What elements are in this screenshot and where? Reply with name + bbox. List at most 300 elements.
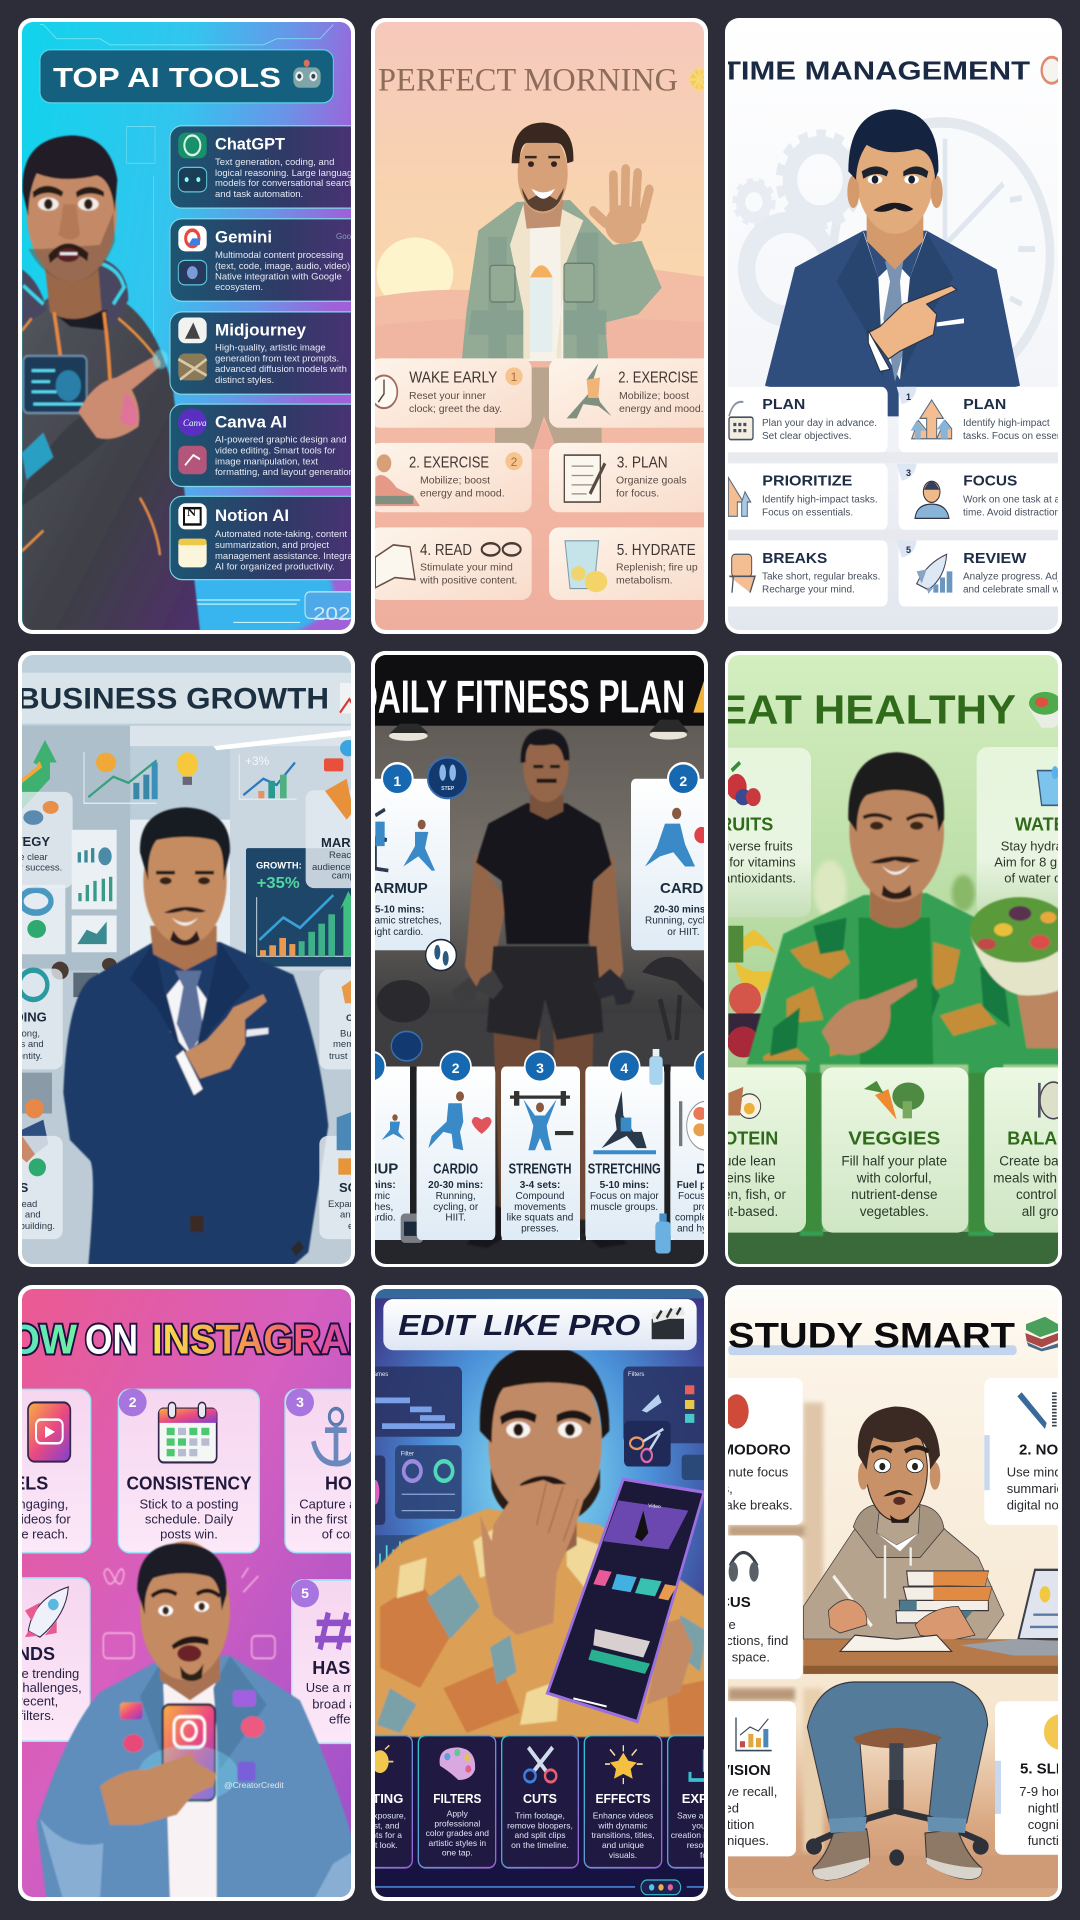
panel: Customer trust: Build [340,1029,361,1040]
panel: Warmup bottom [330,1052,423,1243]
person: smiling man in patterned jacket with salad bowl [747,752,1070,1236]
panel: Gemini: Goo [336,232,352,241]
panel: Customer trust: members [333,1039,373,1050]
panel: Cardio top: 20-30 mins: [654,904,709,916]
panel: Review [897,540,1058,606]
panel labels: floating windows: Filter [401,1451,414,1457]
panel: Export: EXPORT [682,1791,735,1806]
panel: Revision: spaced [697,1800,739,1815]
panel: Exercise top right: energy and mood. [619,403,704,415]
panel: Prioritize: PRIORITIZE [762,473,852,490]
card: Business Growth [18,651,355,1267]
panel: Sales: Lead [16,1199,37,1210]
card: Study Smart [678,1285,1080,1904]
panel: Notes: digital notes. [1007,1497,1080,1512]
panel: Fruits: FRUITS [708,814,773,834]
person: smiling man waving [462,122,662,449]
panel: Customer trust [319,970,373,1069]
panel: Plan: for focus. [616,488,659,500]
year badge [304,591,351,620]
panel: Hooks: HOOKS [325,1473,391,1493]
panel: Plan: 3. PLAN [617,455,668,472]
panel: Marketing: MARKETING [321,835,400,850]
panel: Strength [501,1051,580,1240]
panel: Revision: REVISION [699,1762,771,1779]
footer pill [370,1880,710,1895]
panel: Balance [984,1067,1080,1233]
panel: Strength: presses. [521,1224,559,1235]
panel: Sleep: 7-9 hours [1019,1784,1075,1799]
panel: Plan right: PLAN [963,396,1006,413]
panel: Water: WATER [1015,814,1079,834]
panel: Lighting: highlights for a [347,1830,402,1840]
panel: Pomodoro [678,1378,803,1525]
icon: phone with video editor [547,1479,704,1722]
panel: Export: your final [692,1820,727,1830]
panel: Canva AI: image manipulation, text [215,456,318,467]
panel: Cuts: Trim footage, [515,1811,565,1821]
icon: growth chart [339,683,351,714]
person: man with dumbbells [452,729,635,1248]
panel: Gemini [170,218,351,302]
title [0,1315,380,1362]
panel: Veggies: nutrient-dense [851,1187,937,1202]
panel: Notion AI: Notion AI [215,506,289,525]
panel: Protein: chicken, fish, or [692,1187,786,1202]
panel: Focus: FOCUS [963,473,1017,490]
panel: Reels [0,1389,91,1553]
panel: Filters: FILTERS [433,1791,482,1806]
panel: Notion AI: management assistance. Integrates [215,551,366,562]
panel: Stretching: STRETCHING [588,1161,661,1178]
panel: Marketing [306,740,351,888]
panel: Exercise top right: Mobilize; boost [619,390,689,402]
panel: Effects: EFFECTS [596,1791,651,1806]
panel: Lighting: Adjust exposure, [343,1811,406,1821]
panel: Customer trust: trust [329,1051,348,1062]
person: student at desk [803,1407,1070,1880]
panel: Filters: Apply [447,1808,469,1818]
panel: ChatGPT: models for conversational search [215,178,354,189]
panel: Notion AI: AI for organized productivity. [215,562,335,573]
panel: Canva AI: AI-powered graphic design and [215,435,347,446]
panel: Pomodoro: sessions, [678,1481,733,1496]
panel: Stretching: Focus on major [590,1191,659,1202]
panel: Notion AI: Automated note-taking, content [215,529,347,540]
card: Top AI Tools [18,18,377,649]
panel: Filters: artistic styles in [428,1838,486,1848]
growth board: +3% [245,754,270,768]
panel: Gemini: (text, code, image, audio, video). [215,261,353,272]
title pill [383,1299,697,1350]
panel: Plan left: Plan your day in advance. [762,418,877,429]
panel: Consistency: Stick to a posting [140,1496,238,1512]
panel: Hashtags [291,1580,412,1743]
background: gym [370,652,710,1269]
panel: Read: with positive content. [419,574,517,586]
panel: Diet: protein, [693,1202,726,1213]
panel: Hydrate: Replenish; fire up [616,561,698,573]
panel: ChatGPT [170,125,351,209]
card: Perfect Morning [370,16,716,637]
panel: Cuts: and split clips [514,1830,566,1840]
panel: Scaling: e [348,1221,353,1232]
person: man in navy suit pointing [765,109,1020,416]
panel: Midjourney: generation from text prompts. [215,354,339,364]
panel: Sleep: nightly [1028,1800,1066,1815]
panel: Cuts [502,1736,578,1868]
title: EAT HEALTHY [718,687,1016,733]
panel labels: floating windows: Frames [368,1372,388,1378]
panel: Prioritize: Focus on essentials. [762,508,853,519]
card: Time Management [720,16,1080,637]
panel: ChatGPT: logical reasoning. Large language [215,168,358,179]
panel: Stretching: 5-10 mins: [600,1180,649,1191]
panel: Marketing: Reach [329,850,356,861]
panel: Midjourney: Midjourney [215,320,307,339]
icon: step badges: STEP [441,786,455,792]
panel: Lighting: perfect look. [351,1840,398,1850]
panel: Gemini: Gemini [215,227,272,246]
icon: clapperboard [652,1307,685,1339]
panel: Notes: summaries, [1007,1481,1074,1496]
panel: Warmup bottom: light cardio. [345,1213,396,1224]
panel: Protein [692,1067,806,1233]
panel: Plan right: 1 [906,392,911,402]
panel: Effects: and unique [602,1840,644,1850]
panel: Canva AI: video editing. Smart tools for [215,446,335,457]
icon: water bottles [649,1049,671,1253]
panel: Hashtags: Use a mix of [306,1680,378,1695]
panel: Fruits: for vitamins [729,854,796,869]
background: pink purple gradient [20,1286,353,1902]
panel: Warmup bottom: 5-10 mins: [346,1180,396,1191]
panel: Marketing: campaigns [332,871,378,882]
panel: Hashtags: effectively. [329,1712,389,1726]
panel: Wake Early: 1 [511,370,518,384]
panel: ChatGPT: and task automation. [215,189,303,200]
year badge: 2026 [313,604,363,624]
panel: Read: 4. READ [420,542,472,559]
panel: Exercise top right: 2. EXERCISE [618,370,698,387]
panel: Strength: Compound [516,1191,564,1202]
panel: Midjourney: distinct styles. [215,375,274,386]
panel: Warmup bottom: WARMUP [330,1161,398,1178]
panel: Focus: quiet space. [700,1650,770,1664]
panel: Cardio top: Running, cycling, [645,916,721,927]
panel: Water [977,747,1080,918]
panel: Diet: complex [675,1213,712,1224]
panel: Strength: like squats and [507,1213,573,1224]
panel: Hashtags: HASHTAGS [312,1658,412,1678]
panel: Plan [549,443,716,512]
panel: Effects: with dynamic [597,1820,648,1830]
panel: Trends: Use trending [6,1666,79,1681]
panel: Exercise left: energy and mood. [420,488,505,500]
panel: Wake Early: Reset your inner [409,390,487,402]
growth board: GROWTH: [256,860,302,870]
panel: Veggies: VEGGIES [848,1129,940,1149]
panel: Cardio top: CARDIO [660,880,719,897]
panel: Export: creation in high [671,1830,729,1840]
background: sunrise dunes [370,16,710,637]
panel: Sleep: function. [1028,1833,1077,1848]
panel: Cardio bottom: cycling, or [433,1202,479,1213]
growth board [245,754,356,967]
panel: Cuts: remove bloopers, [507,1820,573,1830]
panel: Diet: Focus on [678,1191,719,1202]
panel: Warmup bottom: Dynamic [351,1191,390,1202]
panel labels: floating windows [368,1372,644,1457]
background: neon studio [370,1286,713,1907]
panel: Strength: 3-4 sets: [520,1180,560,1191]
panel: Fruits: and antioxidants. [698,870,796,885]
panel: ChatGPT: Text generation, coding, and [215,157,334,168]
panel: Focus: time. Avoid distractions. [963,508,1068,519]
panel: Effects: transitions, titles, [591,1830,655,1840]
panel: Exercise left: 2 [511,455,518,469]
panel: Balance: control for [1016,1187,1077,1202]
card: Eat Healthy [692,651,1080,1269]
panel: ChatGPT: ChatGPT [215,134,286,153]
panel: Export [668,1736,735,1868]
background: gears and clock [728,117,1058,630]
panel: Canva AI: formatting, and layout generation. [215,467,357,478]
panel: Canva AI [170,404,351,488]
panel: Lighting: LIGHTING [341,1791,403,1806]
icon: robot [293,60,321,88]
panel: Revision: techniques. [702,1833,769,1848]
panel: Plan left: Set clear objectives. [762,431,852,442]
panel: Wake Early: clock; greet the day. [409,403,502,415]
panel: Sales [0,1136,63,1239]
icon: phone with video editor: Video [648,1503,661,1510]
panel: Effects: visuals. [609,1850,637,1860]
panel: Focus [687,1536,803,1679]
panel: Strength: movements [514,1202,566,1213]
icon: flexed arm [693,679,705,713]
panel labels: floating windows: Filters [628,1372,644,1378]
fruit pile [727,926,777,1058]
panel: Marketing: audience with [312,862,370,873]
panel: Review: and celebrate small wins. [963,584,1075,595]
panel: Gemini: ecosystem. [215,282,263,293]
panel: Notion AI [170,496,351,580]
panel: Sales: and [25,1210,41,1221]
panel: Cardio bottom: CARDIO [433,1161,478,1178]
panel: Breaks: BREAKS [762,550,827,567]
panel: Consistency: schedule. Daily [145,1512,234,1527]
panel: Hooks: in the first 3 secs [291,1512,389,1527]
person: surprised man in tech hoodie [22,135,200,631]
panel: Plan right [896,386,1058,452]
icon: alarm clock [1042,57,1062,83]
panel: Hydrate: 5. HYDRATE [617,542,696,559]
title pill: TOP AI TOOLS [53,62,281,93]
title pill: EDIT LIKE PRO [398,1310,641,1342]
panel: Veggies [822,1067,968,1233]
panel: Gemini: Multimodal content processing [215,250,343,261]
panel: Stretching: 4 [620,1060,628,1076]
title: PERFECT MORNING [378,63,678,99]
title: BUSINESS GROWTH [17,682,329,716]
panel: Effects [584,1736,662,1868]
panel: Fruits: diverse fruits [719,838,793,854]
panel: Stretching: muscle groups. [590,1202,658,1213]
panel: Plan: Organize goals [616,474,687,486]
panel: Midjourney: advanced diffusion models with [215,364,347,375]
panel: Export: Save and [677,1811,713,1821]
credit: @CreatorCredit [224,1780,284,1790]
panel: Canva AI: Canva [183,418,207,428]
panel: Cuts: CUTS [523,1791,557,1806]
panel: Hooks: 3 [296,1394,304,1410]
panel: Revision: Active recall, [704,1784,777,1799]
panel: Strategy [22,792,73,888]
panel: Revision: repetition [701,1817,754,1832]
icon: step badges [391,758,468,1061]
title: DAILY FITNESS PLAN [355,671,685,723]
panel: Sleep: cognitive [1028,1817,1079,1832]
panel: Exercise top right [549,358,716,428]
panel: Filters: professional [434,1818,480,1828]
panel: Warmup top: WARMUP [359,880,428,897]
panel: Veggies: Fill half your plate [841,1154,947,1168]
panel: Focus: Remove [687,1617,736,1632]
panel: Export: resolution [687,1840,724,1850]
panel: Filters [418,1736,496,1868]
panel: Consistency: posts win. [160,1527,218,1542]
panel: Diet [670,1051,732,1240]
panel: Veggies: vegetables. [860,1204,929,1219]
background: office [20,652,355,1269]
panel: Plan right: Identify high-impact [963,418,1050,429]
panel: Diet: DIET [696,1161,730,1178]
panel: Hydrate: metabolism. [616,574,673,586]
panel: Exercise left [370,443,532,512]
panel: Gemini: Native integration with Google [215,272,342,282]
panel: Filters: one tap. [442,1848,473,1858]
panel: Protein: PROTEIN [698,1129,778,1149]
panel: Export: format [700,1850,725,1860]
panel: Plan right: tasks. Focus on essentials. [963,431,1080,442]
card: Grow on Instagram [0,1285,412,1902]
panel: Hooks: Capture attention [299,1496,399,1512]
panel: Wake Early [370,358,532,428]
panel: Warmup top: 1 [393,773,401,789]
panel: Canva AI: Canva AI [215,413,287,432]
panel: Lighting [341,1736,412,1868]
panel: Cardio top: 2 [679,773,687,789]
panel: Exercise left: 2. EXERCISE [409,455,489,472]
panel: Strength: STRENGTH [508,1161,572,1178]
panel: Protein: plant-based. [704,1204,778,1219]
panel: Prioritize: Identify high-impact tasks. [762,495,878,506]
panel: Cardio bottom: 2 [452,1060,460,1076]
panel: Branding [0,969,63,1069]
panel: Sleep [995,1701,1080,1855]
panel: Consistency: 2 [129,1394,137,1410]
panel: Warmup top: light cardio. [372,927,423,938]
panel: Exercise left: Mobilize; boost [420,474,490,486]
person: shocked man in paisley shirt [370,1345,713,1737]
panel: Cardio bottom: 20-30 mins: [428,1180,483,1191]
panel: Consistency [118,1389,259,1553]
title: TIME MANAGEMENT [722,56,1030,86]
panel: Scaling: and [340,1210,356,1221]
panel: Warmup top: Dynamic stretches, [357,916,442,927]
panel: Hydrate [549,527,716,600]
panel: Review: REVIEW [963,550,1027,567]
panel: Breaks [720,540,888,607]
panel: Hooks: of content. [322,1527,382,1542]
panel: Cuts: on the timeline. [511,1840,569,1850]
panel: Midjourney: High-quality, artistic image [215,342,326,354]
background: green gradient [720,652,1067,1269]
panel: Pomodoro: POMODORO [700,1442,791,1459]
panel: Read: Stimulate your mind [420,561,513,573]
panel: Trends [0,1578,90,1741]
panel: Breaks: Recharge your mind. [762,584,855,595]
panel: Diet: and hydrate [677,1224,730,1235]
panel: Protein: Include lean [703,1154,776,1168]
panel: Focus: 3 [906,468,911,478]
panel: Focus: FOCUS [698,1594,751,1611]
card: Daily Fitness Plan [330,651,732,1269]
panel: Veggies: with colorful, [856,1171,932,1186]
panel: Consistency: CONSISTENCY [126,1473,252,1493]
panel: Cardio top: or HIIT. [667,927,700,938]
panel: Cardio bottom: HIIT. [445,1213,466,1224]
icon: books [1025,1317,1058,1351]
panel: Warmup bottom: stretches, [350,1202,393,1213]
panel: Scaling [319,1111,383,1239]
panel: Effects: Enhance videos [593,1811,653,1821]
panel: Customer trust: C [346,1013,353,1024]
panel: Midjourney [170,311,351,395]
panel: Lighting: contrast, and [350,1820,400,1830]
panel: Pomodoro: 25-minute focus [696,1465,789,1480]
title: INSTAGRAM [152,1315,380,1362]
panel: Strength: 3 [536,1060,544,1076]
panel: Review: Analyze progress. Adjust [963,571,1073,582]
panel: Fruits [698,748,811,918]
panel: Focus: Work on one task at a [963,495,1061,506]
panel: Focus [897,464,1058,530]
panel: Branding: Strong, [9,1029,40,1040]
panel: Pomodoro: take breaks. [722,1497,793,1512]
title: ON [85,1315,138,1362]
panel: Hashtags: 5 [301,1585,309,1601]
panel: Read [370,527,532,600]
person: man in navy suit [63,807,328,1265]
panel: Plan left: PLAN [762,396,805,413]
icon: salad [1028,692,1067,728]
person: excited man with phone [37,1541,353,1900]
panel: Scaling: SCALE [339,1180,383,1195]
panel: Branding: identity. [10,1051,42,1062]
panel: Stretching [585,1051,664,1240]
panel: Protein: proteins like [703,1171,775,1186]
panel: Notes [984,1378,1080,1525]
background: study room [720,1286,1067,1904]
growth board: +35% [257,875,300,892]
panel: Warmup top [357,763,450,950]
panel: Warmup top: 5-10 mins: [375,904,424,916]
panel: Focus: distractions, find [694,1633,788,1648]
panel: Sales: building. [20,1221,55,1232]
panel: Review: 5 [906,545,911,555]
